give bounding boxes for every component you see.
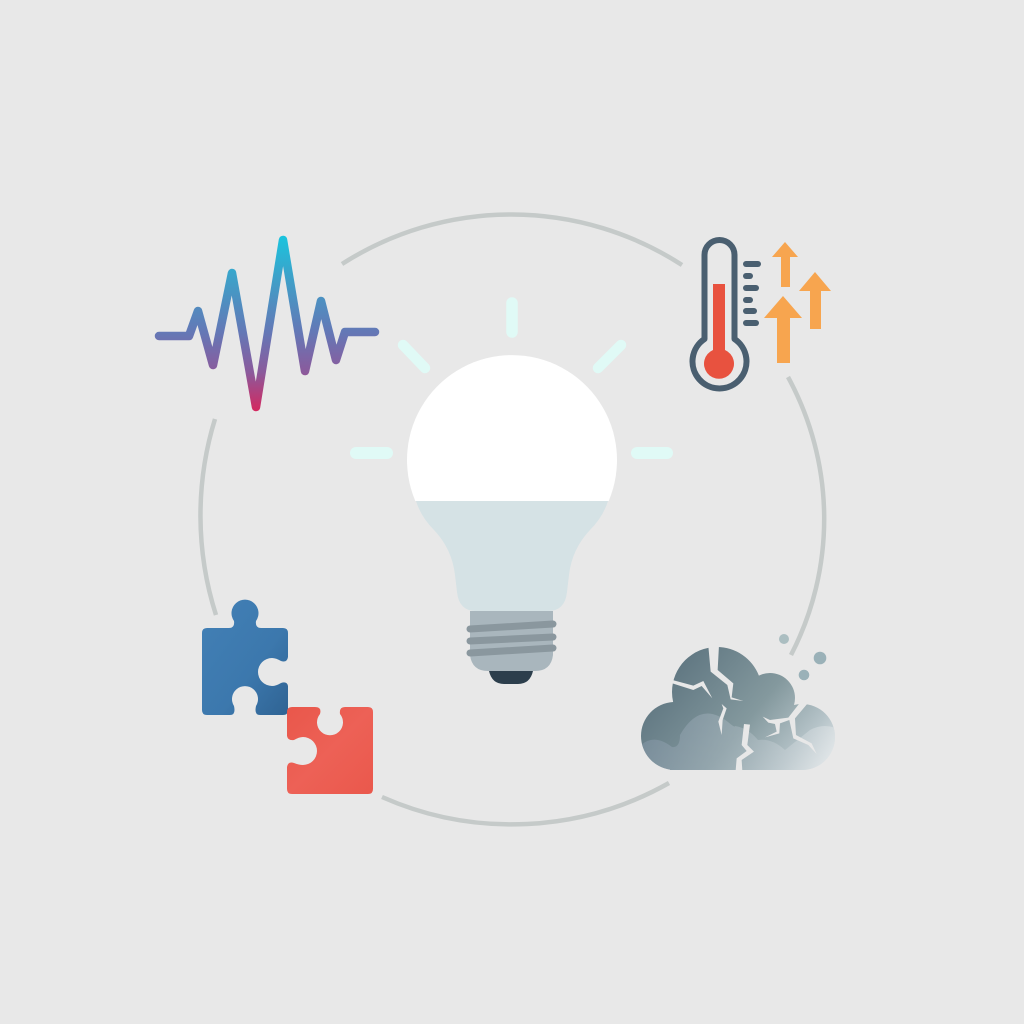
icon: rising arrows [764,242,831,363]
bulb glowing globe [407,355,617,501]
cloud cracks [670,645,817,771]
thermometer mercury [704,284,734,379]
icon: pulse waveform [159,240,375,407]
icon: thermometer [692,240,758,388]
icon: light rays [356,303,667,453]
cloud inner lighter lobes [642,714,835,770]
icon: puzzle pieces [202,600,373,794]
bulb lower glass [416,501,608,611]
cloud body [641,647,835,770]
thermometer ticks [746,264,758,323]
circular ring arcs [200,214,824,824]
bulb screw base [470,611,553,671]
icon: cracked cloud [635,634,840,775]
bulb contact tip [489,671,533,684]
cloud debris dots [779,634,789,644]
icon: light bulb [407,355,617,684]
blue puzzle piece [202,600,288,715]
bulb screw threads [470,624,553,653]
thermometer outline [692,240,746,388]
red puzzle piece [287,707,373,794]
